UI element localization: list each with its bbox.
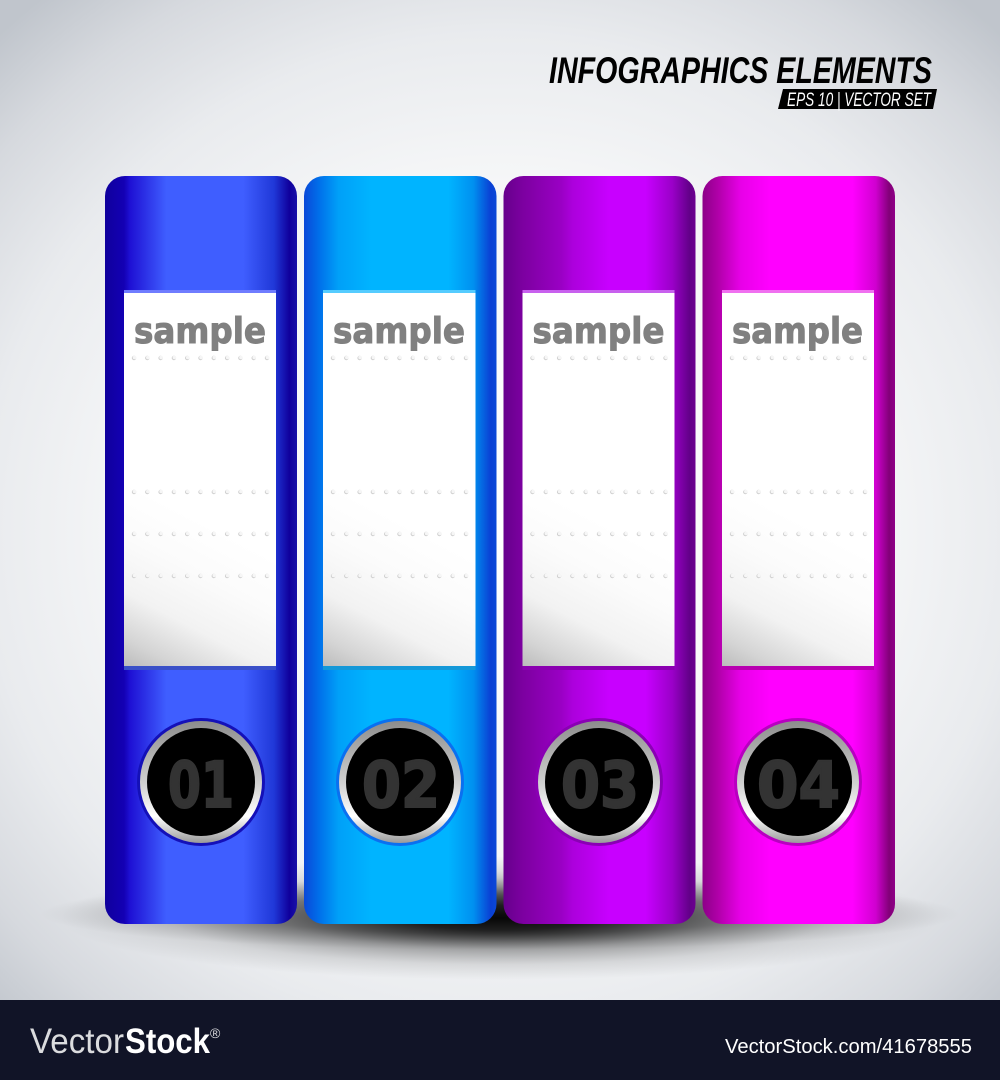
label heading: sample — [532, 311, 664, 352]
title block — [549, 50, 937, 111]
label heading: sample — [732, 311, 863, 352]
binder spine — [504, 176, 696, 924]
panel: binder 01 — [105, 176, 297, 924]
panel: binder 03 — [504, 176, 696, 924]
label — [124, 290, 276, 670]
binder spine — [105, 176, 297, 924]
number badge — [535, 718, 663, 846]
label — [722, 290, 874, 670]
panel: binder 02 — [304, 176, 496, 924]
binder spine — [702, 176, 895, 924]
binder spine — [304, 176, 496, 924]
footer logo — [30, 1022, 221, 1061]
number badge — [137, 718, 265, 846]
footer url: VectorStock.com/41678555 — [725, 1036, 972, 1058]
floor shadow — [40, 856, 960, 980]
subtitle badge: EPS 10 | VECTOR SET — [787, 90, 932, 111]
subtitle badge — [778, 89, 937, 111]
number badge: 01 — [168, 749, 234, 822]
label — [522, 290, 674, 670]
footer logo: Vector — [30, 1022, 124, 1061]
footer logo: Stock — [125, 1022, 210, 1061]
panel: binder 04 — [702, 176, 895, 924]
number badge — [336, 718, 464, 846]
label heading: sample — [333, 311, 465, 352]
footer logo: ® — [210, 1025, 221, 1041]
number badge: 04 — [757, 749, 840, 822]
number badge: 02 — [362, 749, 440, 822]
label heading: sample — [134, 311, 266, 352]
label — [323, 290, 476, 670]
number badge — [734, 718, 862, 846]
number badge: 03 — [561, 749, 639, 822]
footer bar — [0, 1000, 1000, 1080]
